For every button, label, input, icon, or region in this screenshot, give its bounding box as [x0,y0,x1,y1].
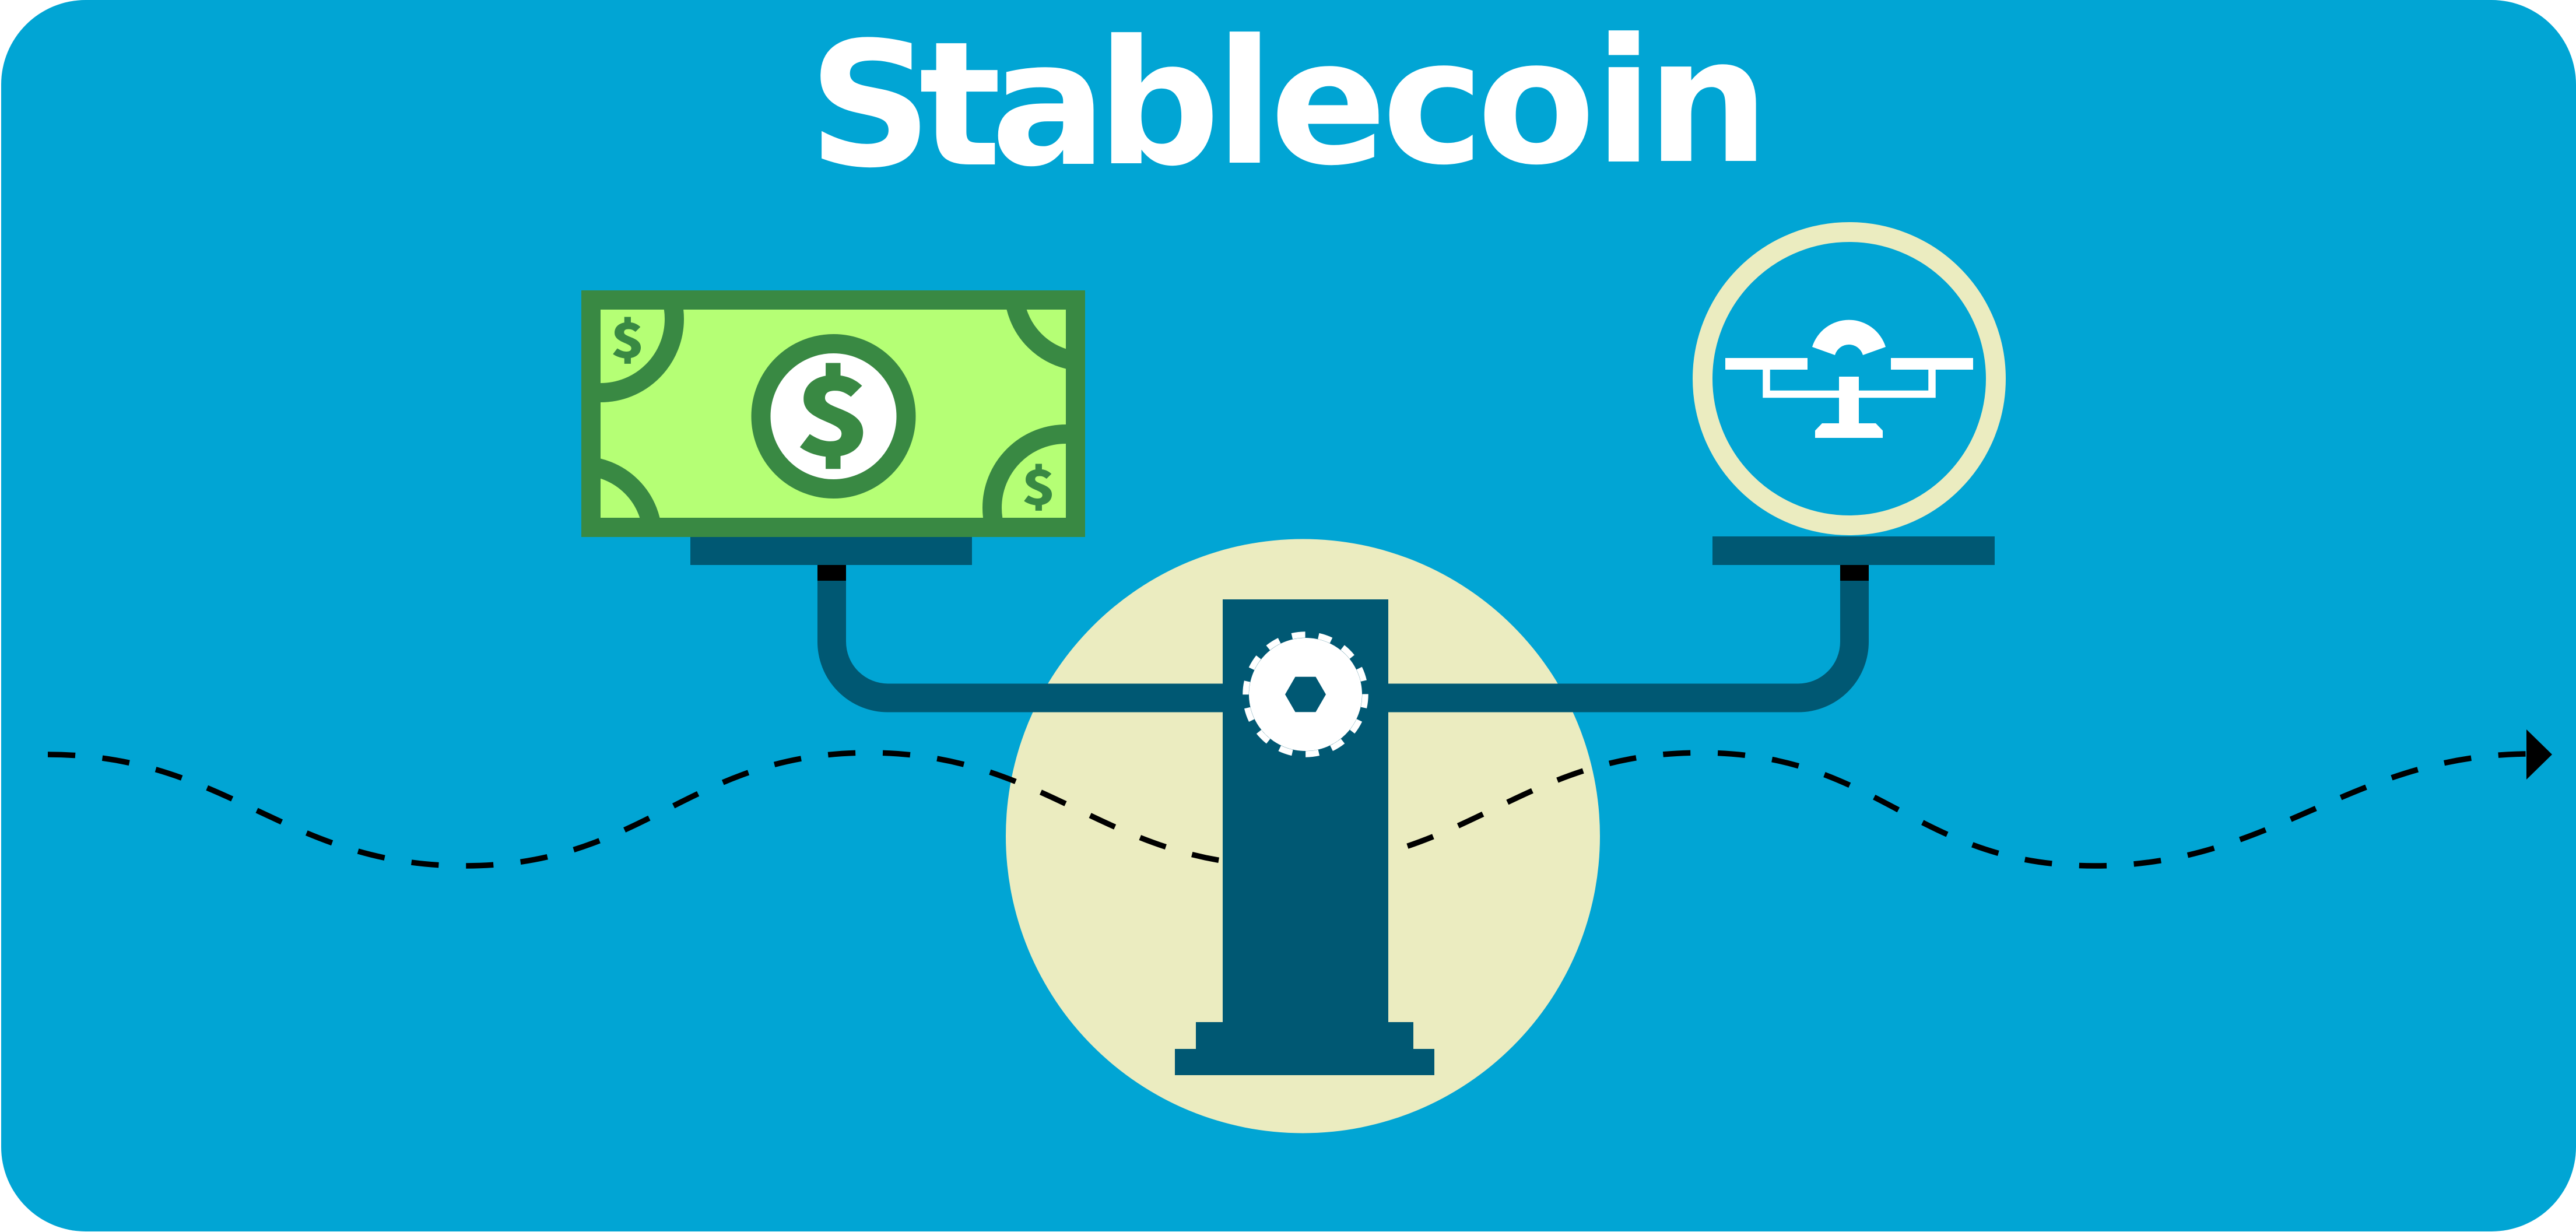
right arm [1388,565,1855,698]
corner arcs [601,310,1066,518]
scale dome [1812,320,1886,355]
centre medallion [761,344,906,489]
top-left dollar sign: $ [610,302,645,371]
dashed wave line [48,753,2531,866]
right platform [1712,536,1995,565]
left black joint [817,565,846,581]
gear hexagon hole [1285,677,1326,712]
note paper [581,290,1085,537]
scale post and base [1815,377,1883,438]
coin ring [1703,232,1996,525]
left platform [690,537,972,565]
arrow head [2526,729,2552,780]
title: Stablecoin [808,1,1770,206]
scale beam [1767,370,1932,394]
scale right tray [1891,358,1973,370]
note border [591,300,1075,527]
centre dollar sign: $ [795,330,872,487]
gear body [1249,638,1362,751]
icon: dollar banknote [581,290,1085,537]
pillar with stepped base [1175,599,1434,1075]
right black joint [1840,565,1869,581]
balance scale: arms and pillar [690,536,1995,1075]
icon: gear [1245,634,1366,754]
dashed wave arrow [48,729,2552,866]
bottom-right dollar sign: $ [1022,449,1056,518]
left arm [831,565,1224,698]
gear teeth [1245,634,1366,754]
cream fulcrum circle [1006,539,1600,1133]
scale left tray [1725,358,1808,370]
icon: stablecoin ring with scale [1703,232,1996,525]
